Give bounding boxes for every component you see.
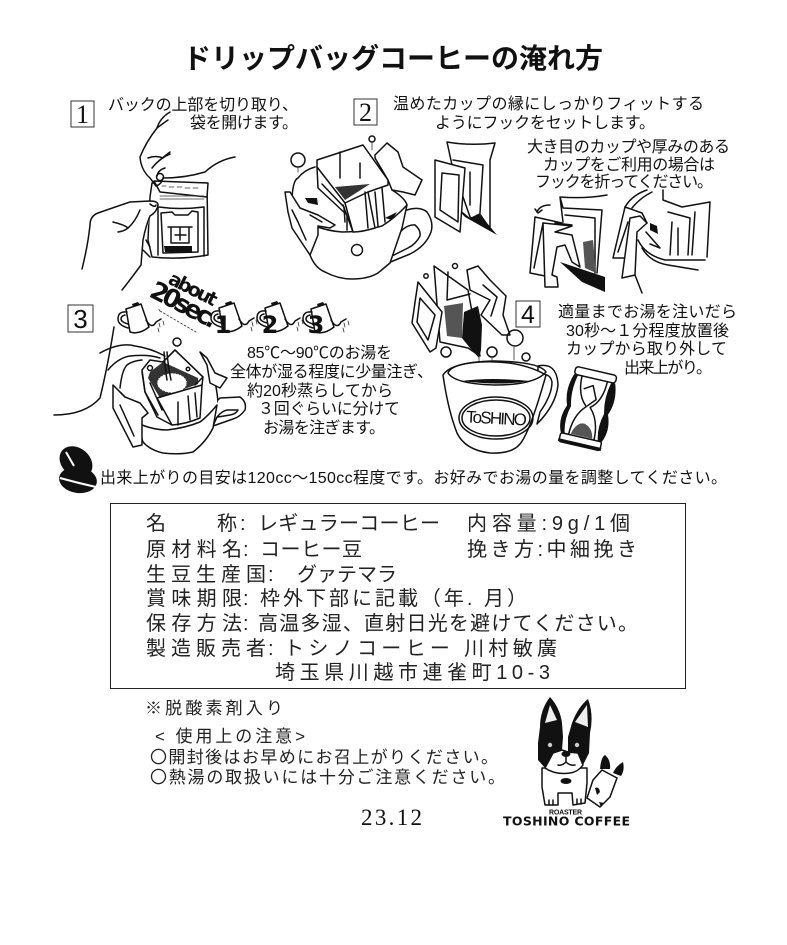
icon: kettle pour 1: 1 — [215, 311, 231, 339]
oxygen absorber note: ※脱酸素剤入り — [145, 699, 283, 718]
step 4 instructions — [558, 303, 737, 377]
origin — [146, 563, 397, 586]
product name and contents: 称 — [217, 512, 237, 535]
icon: large french bulldog — [537, 697, 592, 805]
step 2 large cup note: フックを折ってください。 — [535, 173, 713, 191]
step 4 number box: 4 — [521, 301, 535, 329]
usage cautions: 〇熱湯の取扱いには十分ご注意ください。 — [150, 768, 505, 787]
step 2 instructions — [393, 95, 704, 132]
step 3 instructions: お湯を注ぎます。 — [263, 419, 385, 437]
step 3 instructions: 全体が湿る程度に少量注ぎ、 — [230, 363, 433, 381]
step 3 instructions: ３回ぐらいに分けて — [258, 400, 400, 418]
logo wordmark: TOSHINO COFFEE — [503, 814, 630, 828]
best before: 枠外下部に記載（年. 月） — [260, 587, 527, 610]
about 20 sec label: about — [165, 268, 221, 311]
icon: kettle before steaming — [118, 302, 164, 333]
step 1 number box: 1 — [76, 100, 89, 129]
step 2 large cup note: カップをご利用の場合は — [543, 156, 715, 174]
panel: step 4 remove the bag — [412, 264, 737, 453]
illustration: folded hook on thick cup — [613, 190, 710, 293]
step 2 number box — [354, 98, 377, 127]
step 4 instructions: 適量までお湯を注いだら — [558, 303, 737, 321]
step 3 number box: 3 — [73, 304, 88, 334]
usage cautions: 〇開封後はお早めにお召上がりください。 — [150, 748, 498, 767]
illustration: folding the hook — [530, 195, 607, 292]
origin: グァテマラ — [297, 563, 397, 586]
logo wordmark: ROASTER — [549, 810, 582, 816]
step 1 number box — [71, 100, 94, 129]
icon: kettle pour 2: 2 — [262, 311, 278, 339]
step 4 instructions: 30秒～１分程度放置後 — [566, 322, 729, 340]
step 4 number box — [516, 301, 540, 329]
panel: step 1 open the bag — [71, 96, 298, 290]
seller — [146, 637, 557, 660]
step 1 instructions — [108, 96, 298, 132]
illustration: toshino cup — [443, 361, 558, 453]
product name and contents: : — [240, 513, 246, 535]
about 20 sec label: 20sec. — [145, 276, 223, 334]
step 2 large cup note — [527, 138, 730, 191]
illustration: lifting the used bag — [412, 264, 530, 367]
best before: : — [243, 588, 249, 610]
step 4 instructions: カップから取り外して — [566, 340, 727, 358]
icon: small french bulldog — [587, 755, 624, 807]
step 2 number box: 2 — [359, 98, 372, 127]
step 2 instructions: ようにフックをセットします。 — [435, 114, 655, 132]
best before: 賞味期限 — [146, 587, 242, 610]
product name and contents — [146, 512, 630, 535]
product name and contents: レギュラーコーヒー — [258, 512, 440, 535]
icon: kettle pour 1 — [211, 301, 257, 339]
date code: 23.12 — [361, 805, 422, 830]
title: ドリップバッグコーヒーの淹れ方 — [183, 42, 603, 74]
yield note: 出来上がりの目安は120cc～150cc程度です。お好みでお湯の量を調整してください。 — [100, 469, 727, 487]
illustration: pouring water over the bag — [54, 327, 245, 454]
icon: kettle pour 3 — [303, 302, 349, 339]
illustration: hands tearing the bag — [82, 112, 235, 290]
panel: step 3 pour hot water — [54, 268, 433, 454]
icon: kettle pour 3: 3 — [308, 311, 324, 339]
illustration: drip bag set on cup — [285, 136, 432, 279]
step 1 instructions: バックの上部を切り取り、 — [108, 96, 298, 114]
panel: step 2 fit the hook on the cup — [285, 95, 730, 293]
seller: : — [268, 638, 274, 660]
step 3 instructions: 85℃～90℃のお湯を — [247, 344, 392, 362]
storage: : — [243, 613, 249, 635]
arrow: steaming time — [158, 308, 196, 332]
best before — [146, 587, 527, 610]
ingredients and grind: コーヒー豆 — [260, 539, 362, 561]
panel: product details table — [110, 504, 686, 688]
step 3 number box — [68, 304, 93, 334]
usage cautions — [150, 726, 505, 787]
icon: kettle pour 2 — [257, 301, 303, 339]
step 2 large cup note: 大き目のカップや厚みのある — [527, 138, 730, 156]
step 3 instructions: 約20秒蒸らしてから — [247, 382, 393, 400]
illustration: hourglass — [556, 366, 620, 451]
logo: toshino coffee dogs — [503, 697, 630, 828]
ingredients and grind: 挽き方:中細挽き — [467, 538, 637, 561]
origin: 生豆生産国 — [146, 563, 266, 586]
seller: 製造販売者 — [146, 637, 266, 660]
ingredients and grind: : — [243, 539, 249, 561]
step 4 instructions: 出来上がり。 — [624, 359, 712, 377]
usage cautions: < 使用上の注意> — [155, 726, 305, 746]
ingredients and grind — [146, 538, 637, 561]
ingredients and grind: 原材料名 — [146, 538, 242, 561]
seller: トシノコーヒー 川村敏廣 — [284, 637, 557, 660]
storage: 高温多湿、直射日光を避けてください。 — [258, 612, 638, 635]
icon: coffee beans — [53, 440, 99, 496]
product name and contents: 名 — [146, 512, 166, 535]
step 1 instructions: 袋を開けます。 — [190, 114, 298, 132]
step 3 instructions — [230, 344, 433, 437]
illustration: toshino cup: ToSHINO — [466, 407, 527, 430]
step 2 instructions: 温めたカップの縁にしっかりフィットする — [393, 95, 704, 113]
address: 埼玉県川越市連雀町10-3 — [275, 661, 550, 684]
origin: : — [268, 564, 274, 586]
product name and contents: 内容量:9g/1個 — [467, 512, 630, 535]
illustration: drip bag with hook, side view — [435, 142, 497, 235]
storage: 保存方法 — [146, 612, 242, 635]
